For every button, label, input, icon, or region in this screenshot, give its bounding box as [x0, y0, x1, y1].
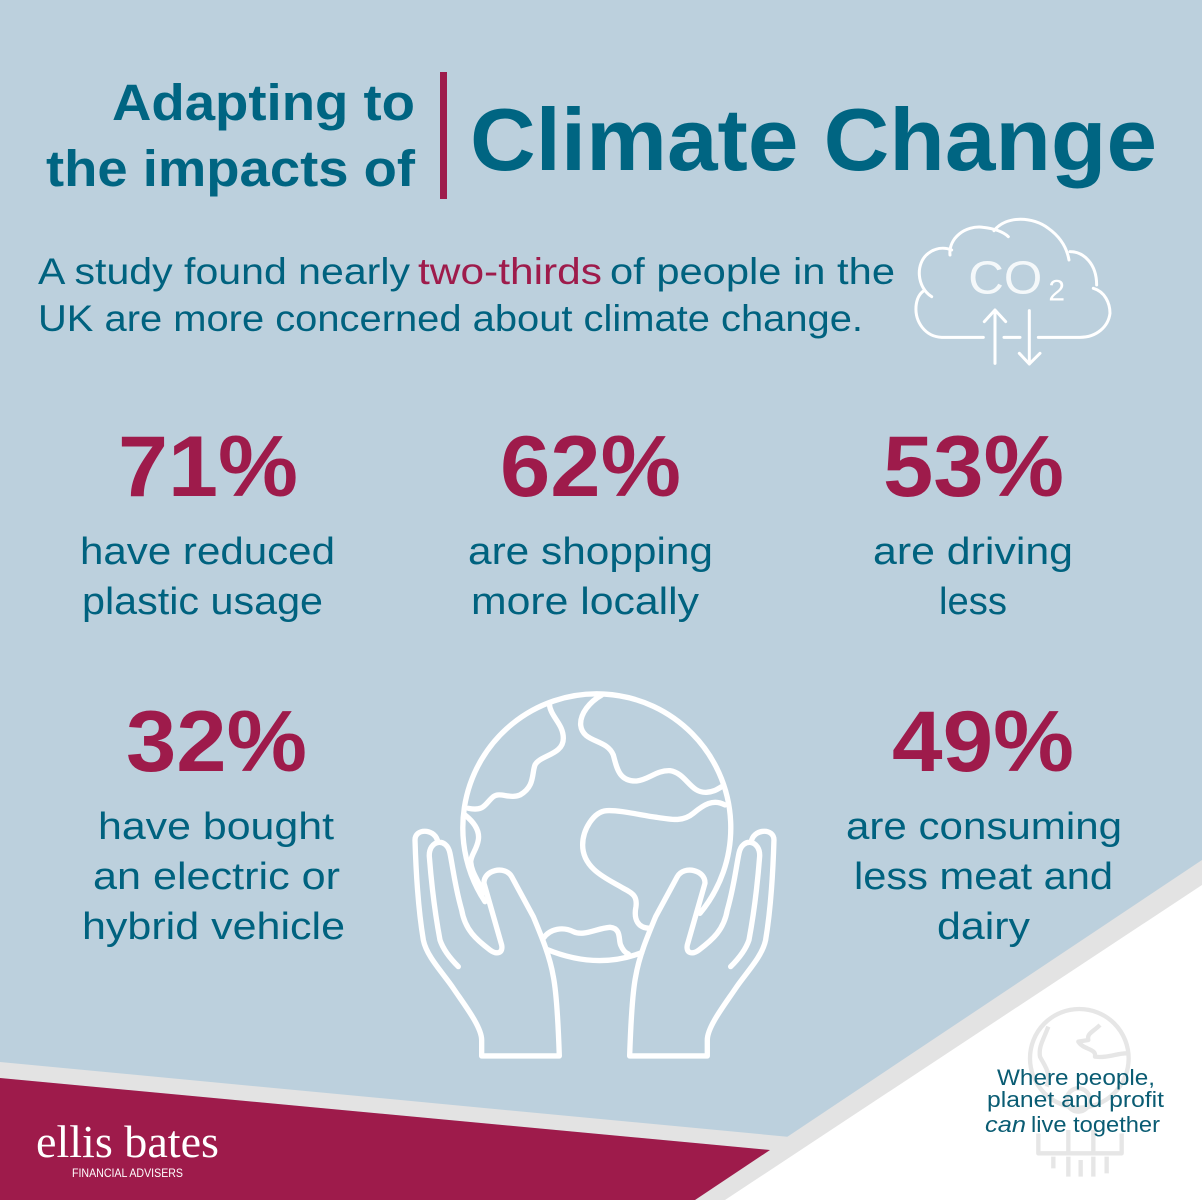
grey band bottom left: [0, 1062, 790, 1150]
icon: CO2 cloud: CO: [968, 252, 1042, 304]
stat: 49%: are consuming: [846, 806, 1122, 848]
stat: 62%: 62%: [500, 419, 681, 515]
title: [46, 72, 1157, 199]
intro text: UK are more concerned about climate change.: [38, 298, 863, 339]
stat: 32%: an electric or: [93, 856, 340, 898]
icon: CO2 cloud: 2: [1048, 275, 1065, 308]
stat: 53%: are driving: [873, 531, 1073, 573]
stat: 49%: dairy: [937, 906, 1030, 948]
title: Climate Change: [470, 90, 1157, 189]
grey band right: [695, 860, 1202, 1200]
stat: 32%: hybrid vehicle: [82, 906, 345, 948]
stat: 49%: less meat and: [854, 856, 1113, 898]
tagline: [985, 1065, 1164, 1137]
crimson corner: [0, 1078, 770, 1200]
icon: CO2 cloud: [916, 219, 1110, 364]
icon: faint globe and people: [1030, 1009, 1129, 1177]
tagline: Where people,: [997, 1065, 1155, 1090]
intro text: A study found nearly: [38, 251, 411, 292]
tagline: can: [985, 1112, 1026, 1137]
stat: 53%: less: [939, 581, 1007, 623]
stat: 32%: 32%: [126, 694, 307, 790]
white corner: [725, 885, 1202, 1200]
stat: 62%: [468, 419, 713, 623]
stat: 71%: plastic usage: [82, 581, 323, 623]
icon: hands holding globe: [415, 694, 774, 1056]
stat: 53%: 53%: [883, 419, 1064, 515]
stat: 49%: 49%: [892, 694, 1074, 790]
logo: ellis bates: ellis bates: [36, 1116, 219, 1167]
tagline: planet and profit: [987, 1087, 1164, 1112]
stat: 49%: [846, 694, 1122, 948]
stat: 62%: more locally: [471, 581, 699, 623]
title: the impacts of: [46, 140, 416, 197]
stat: 71%: have reduced: [80, 531, 335, 573]
tagline: live together: [1031, 1112, 1160, 1137]
intro text: [38, 251, 895, 339]
stat: 62%: are shopping: [468, 531, 713, 573]
intro text: two-thirds: [418, 251, 602, 292]
intro text: of people in the: [610, 251, 895, 292]
stat: 32%: [82, 694, 345, 948]
logo: ellis bates: FINANCIAL ADVISERS: [72, 1168, 183, 1180]
stat: 53%: [873, 419, 1073, 623]
stat: 32%: have bought: [98, 806, 334, 848]
stat: 71%: 71%: [118, 419, 298, 515]
title: Adapting to: [112, 74, 415, 131]
stat: 71%: [80, 419, 335, 623]
